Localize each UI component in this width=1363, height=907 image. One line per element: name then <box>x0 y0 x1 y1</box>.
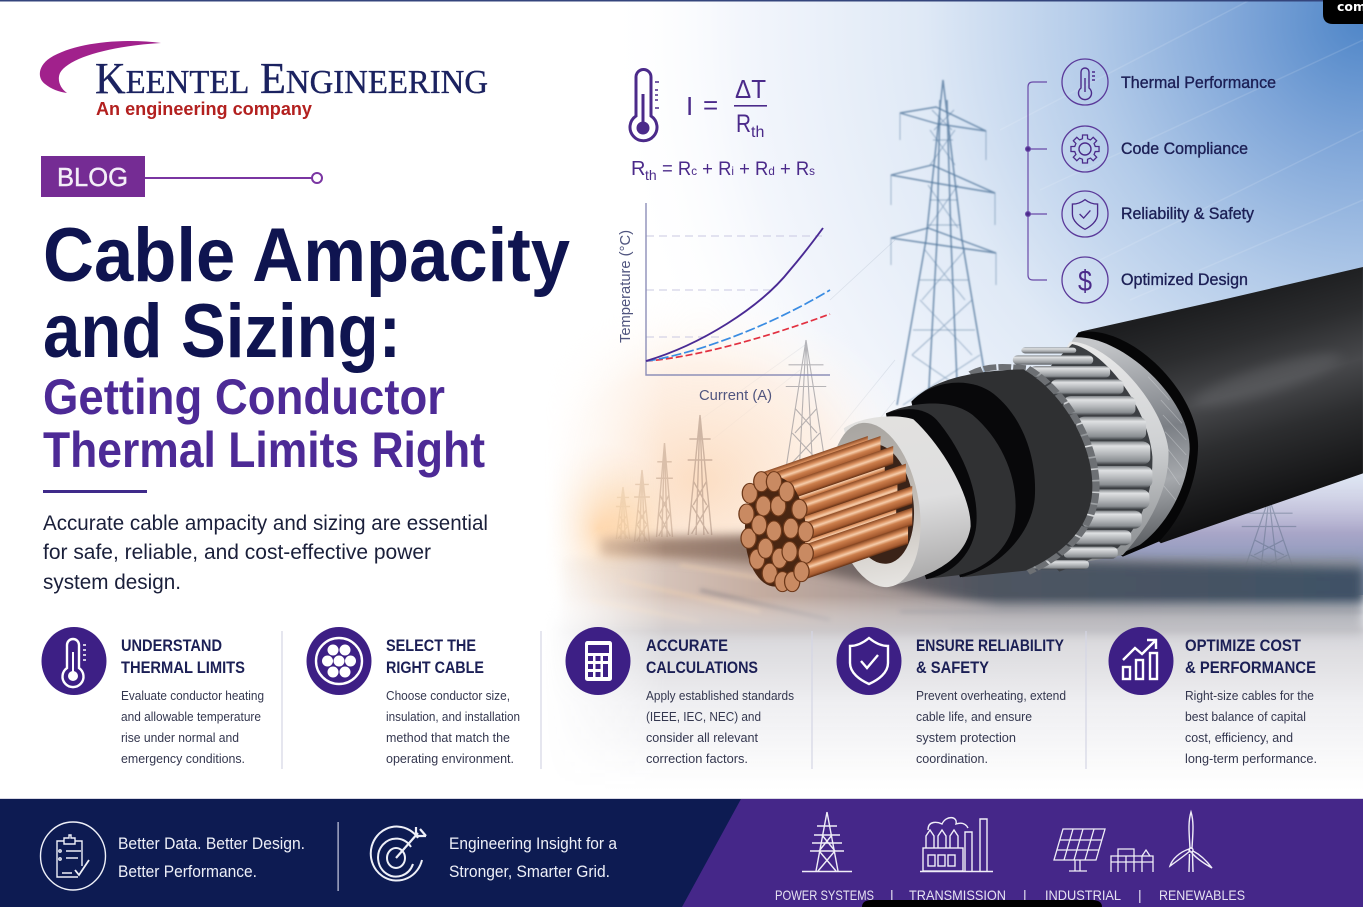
heading: UNDERSTAND <box>121 637 222 655</box>
icon: growth chart badge <box>1108 627 1174 695</box>
item: optimized design <box>1062 257 1248 303</box>
item: code compliance: Code Compliance <box>1121 140 1248 158</box>
formula: thermal resistance <box>631 158 815 183</box>
inner bedding layer <box>886 403 1016 579</box>
body text: cost, efficiency, and <box>1185 730 1293 745</box>
formula: current: = <box>703 90 718 120</box>
body text: Choose conductor size, <box>386 688 510 703</box>
footer message two: Engineering Insight for a <box>449 835 618 853</box>
item: code compliance <box>1062 126 1248 172</box>
y-axis label: Temperature (°C) <box>617 230 634 343</box>
footer band <box>0 798 1363 907</box>
title: Cable Ampacity <box>43 213 570 298</box>
icon: clipboard checklist <box>40 822 106 890</box>
body text: cable life, and ensure <box>916 709 1032 724</box>
body text: Prevent overheating, extend <box>916 688 1066 703</box>
icon: power tower <box>802 812 852 872</box>
tree line <box>600 534 1363 606</box>
insulation end face <box>819 419 931 591</box>
body text: coordination. <box>916 751 988 766</box>
curve: purple <box>646 228 823 361</box>
body text: long-term performance. <box>1185 751 1317 766</box>
tagline: An engineering company <box>96 98 313 119</box>
body text <box>916 688 1066 766</box>
item: optimized design: $ <box>1078 265 1092 298</box>
formula: current: R <box>736 110 751 138</box>
logo <box>40 41 488 119</box>
main tower <box>891 80 996 405</box>
conductor hole <box>839 442 920 566</box>
body text: (IEEE, IEC, NEC) and <box>646 709 761 724</box>
body text: Apply established standards <box>646 688 794 703</box>
footer message one <box>118 835 305 881</box>
blog tag: BLOG <box>57 164 128 192</box>
feature: select the right cable <box>306 627 520 766</box>
body text: method that match the <box>386 730 510 745</box>
intro paragraph <box>43 511 488 594</box>
title <box>43 213 570 374</box>
icon: cable cross-section badge <box>306 627 372 695</box>
formula: current: ΔT <box>735 74 766 104</box>
design goals list <box>1026 59 1276 303</box>
copper conductor strands <box>739 436 912 592</box>
title: and Sizing: <box>43 289 401 374</box>
armour base <box>954 344 1152 572</box>
black tab top right <box>1323 0 1363 24</box>
formula: current: th <box>751 124 764 141</box>
footer message one: Better Data. Better Design. <box>118 835 305 853</box>
icon: shield badge <box>836 627 902 695</box>
body text: correction factors. <box>646 751 748 766</box>
formula: current: I <box>686 91 693 121</box>
body text <box>121 688 264 766</box>
icon: solar panel and plant <box>1054 829 1153 872</box>
background scene: sky and horizon <box>557 2 1363 595</box>
grid lines <box>646 236 822 337</box>
background scene: ground and fade <box>567 528 1363 750</box>
axes <box>646 203 830 375</box>
item: thermal performance: Thermal Performance <box>1121 74 1276 92</box>
footer message two <box>449 835 618 881</box>
sector labels: TRANSMISSION <box>909 887 1006 903</box>
body text: best balance of capital <box>1185 709 1306 724</box>
sector labels: RENEWABLES <box>1159 887 1245 903</box>
icon: calculator badge <box>566 627 630 695</box>
body text: operating environment. <box>386 751 514 766</box>
subtitle <box>43 369 485 478</box>
transmission towers <box>616 80 1296 574</box>
intro paragraph: system design. <box>43 570 181 594</box>
cable cross-section illustration <box>739 267 1363 592</box>
thermal formula <box>630 70 815 183</box>
footer message one: Better Performance. <box>118 863 257 881</box>
jacket end ring <box>996 332 1198 557</box>
feature: understand thermal limits <box>42 627 264 766</box>
subtitle: Thermal Limits Right <box>43 422 485 478</box>
feature: ensure reliability and safety <box>836 627 1066 766</box>
feature: ensure reliability and safety: & SAFETY <box>916 659 989 677</box>
icon: wind turbine <box>1170 812 1212 872</box>
sector labels: | <box>890 887 894 903</box>
sector labels: | <box>1023 887 1027 903</box>
subtitle: Getting Conductor <box>43 369 445 425</box>
white insulation <box>844 416 971 587</box>
sector labels <box>775 887 1245 903</box>
body text: system protection <box>916 730 1016 745</box>
body text: consider all relevant <box>646 730 758 745</box>
body text: Right-size cables for the <box>1185 688 1314 703</box>
feature: optimize cost and performance <box>1108 627 1317 766</box>
formula: thermal resistance: = Rc + Ri + Rd + Rs <box>662 159 815 180</box>
item: thermal performance <box>1062 59 1276 105</box>
heading: ACCURATE <box>646 637 728 655</box>
curve: red <box>646 314 830 361</box>
feature: select the right cable: RIGHT CABLE <box>386 659 484 677</box>
column separators <box>282 631 1086 769</box>
item: reliability and safety <box>1062 191 1255 237</box>
logo swoosh <box>40 41 161 93</box>
armour twisted edge <box>971 367 1096 572</box>
intro paragraph: for safe, reliable, and cost-effective power <box>43 540 431 564</box>
footer message two: Stronger, Smarter Grid. <box>449 863 610 881</box>
formula: thermal resistance: th <box>645 167 657 183</box>
heading: ENSURE RELIABILITY <box>916 637 1064 655</box>
outer jacket <box>1081 267 1363 543</box>
silver band <box>996 342 1169 567</box>
icon: thermometer <box>630 70 659 141</box>
heading: SELECT THE <box>386 637 476 655</box>
item: reliability and safety: Reliability & Safety <box>1121 205 1255 223</box>
metallic foil screen <box>996 337 1190 557</box>
formula: thermal resistance: R <box>631 158 645 180</box>
body text: Evaluate conductor heating <box>121 688 264 703</box>
body text: emergency conditions. <box>121 751 245 766</box>
formula: current <box>686 74 767 141</box>
feature: accurate calculations <box>566 627 794 766</box>
body text: and allowable temperature <box>121 709 261 724</box>
black tab bottom <box>862 900 1102 907</box>
intro paragraph: Accurate cable ampacity and sizing are essential <box>43 511 488 535</box>
icon: target <box>371 827 426 881</box>
sector labels: POWER SYSTEMS <box>775 887 874 903</box>
outer bedding layer <box>911 369 1092 577</box>
body text <box>1185 688 1317 766</box>
item: optimized design: Optimized Design <box>1121 271 1248 289</box>
armour wires <box>1013 347 1152 569</box>
curve: blue <box>646 290 830 361</box>
top border <box>0 0 1363 2</box>
heading: OPTIMIZE COST <box>1185 637 1301 655</box>
sector labels: | <box>1138 887 1142 903</box>
sector labels: INDUSTRIAL <box>1045 887 1121 903</box>
bracket connector <box>1026 82 1047 280</box>
icon: factory <box>920 818 993 872</box>
blog tag <box>41 156 322 197</box>
feature: understand thermal limits: THERMAL LIMITS <box>121 659 245 677</box>
company name: KEENTEL ENGINEERING <box>95 54 488 103</box>
body text: insulation, and installation <box>386 709 520 724</box>
feature: optimize cost and performance: & PERFORMANCE <box>1185 659 1316 677</box>
icon: thermometer badge <box>42 627 106 695</box>
divider <box>338 822 339 891</box>
body text <box>646 688 794 766</box>
body text <box>386 688 520 766</box>
x-axis label: Current (A) <box>699 387 772 404</box>
title underline <box>43 490 147 493</box>
temperature vs current chart <box>617 203 830 404</box>
road surface <box>560 558 1363 636</box>
feature: accurate calculations: CALCULATIONS <box>646 659 758 677</box>
body text: rise under normal and <box>121 730 239 745</box>
